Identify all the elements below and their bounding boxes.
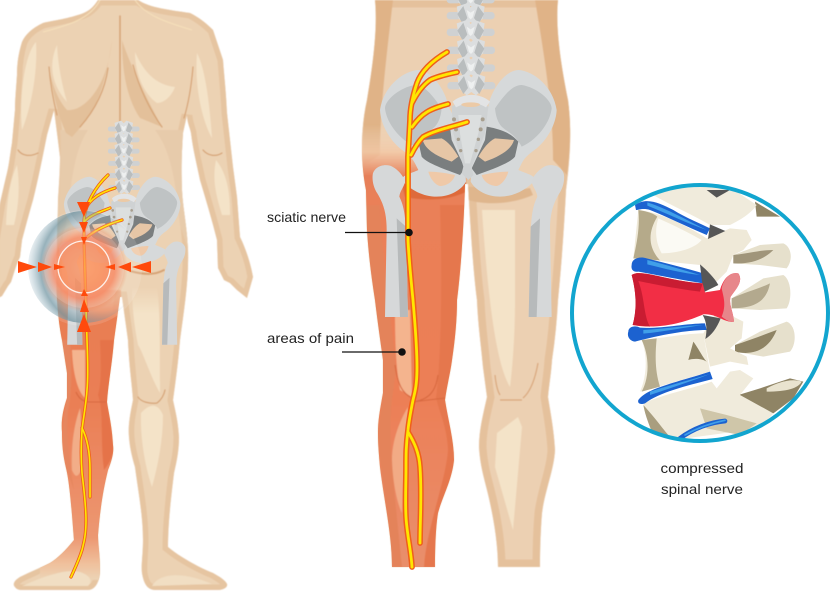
body with muscle shading: [0, 0, 253, 590]
inset background circle: [572, 185, 828, 441]
caption: compressed spinal nerve: [660, 460, 744, 497]
herniated disc: red: [632, 273, 740, 327]
pain arrows: [18, 202, 151, 332]
pain burst with rings: [26, 210, 142, 326]
discs: blue: [628, 201, 725, 438]
label: sciatic nerve: sciatic nerve: [267, 209, 346, 225]
sciatic nerve: [406, 52, 467, 567]
body with shading: [362, 0, 570, 567]
facet processes: [732, 202, 803, 413]
pain shading: left leg: [22, 290, 121, 586]
caption: compressed spinal nerve: compressed: [660, 460, 744, 476]
dark foramen wedges: [700, 224, 725, 339]
pain shading: left leg: [355, 125, 466, 570]
vertebrae bodies: [633, 185, 773, 442]
label: areas of pain: areas of pain: [267, 330, 354, 346]
middle figure: lower body with sciatic nerve: [355, 0, 570, 570]
skeleton: spine and pelvis: [373, 0, 564, 317]
left figure: full body back view with pain area: [0, 0, 253, 590]
label: areas of pain: [267, 330, 406, 356]
inset ring: [572, 185, 828, 441]
inset: compressed spinal nerve magnifier: [572, 185, 828, 442]
skeleton: spine and pelvis: [59, 121, 185, 345]
caption: compressed spinal nerve: spinal nerve: [661, 481, 743, 497]
sciatic nerve: [71, 175, 122, 577]
label: sciatic nerve: [267, 209, 413, 236]
